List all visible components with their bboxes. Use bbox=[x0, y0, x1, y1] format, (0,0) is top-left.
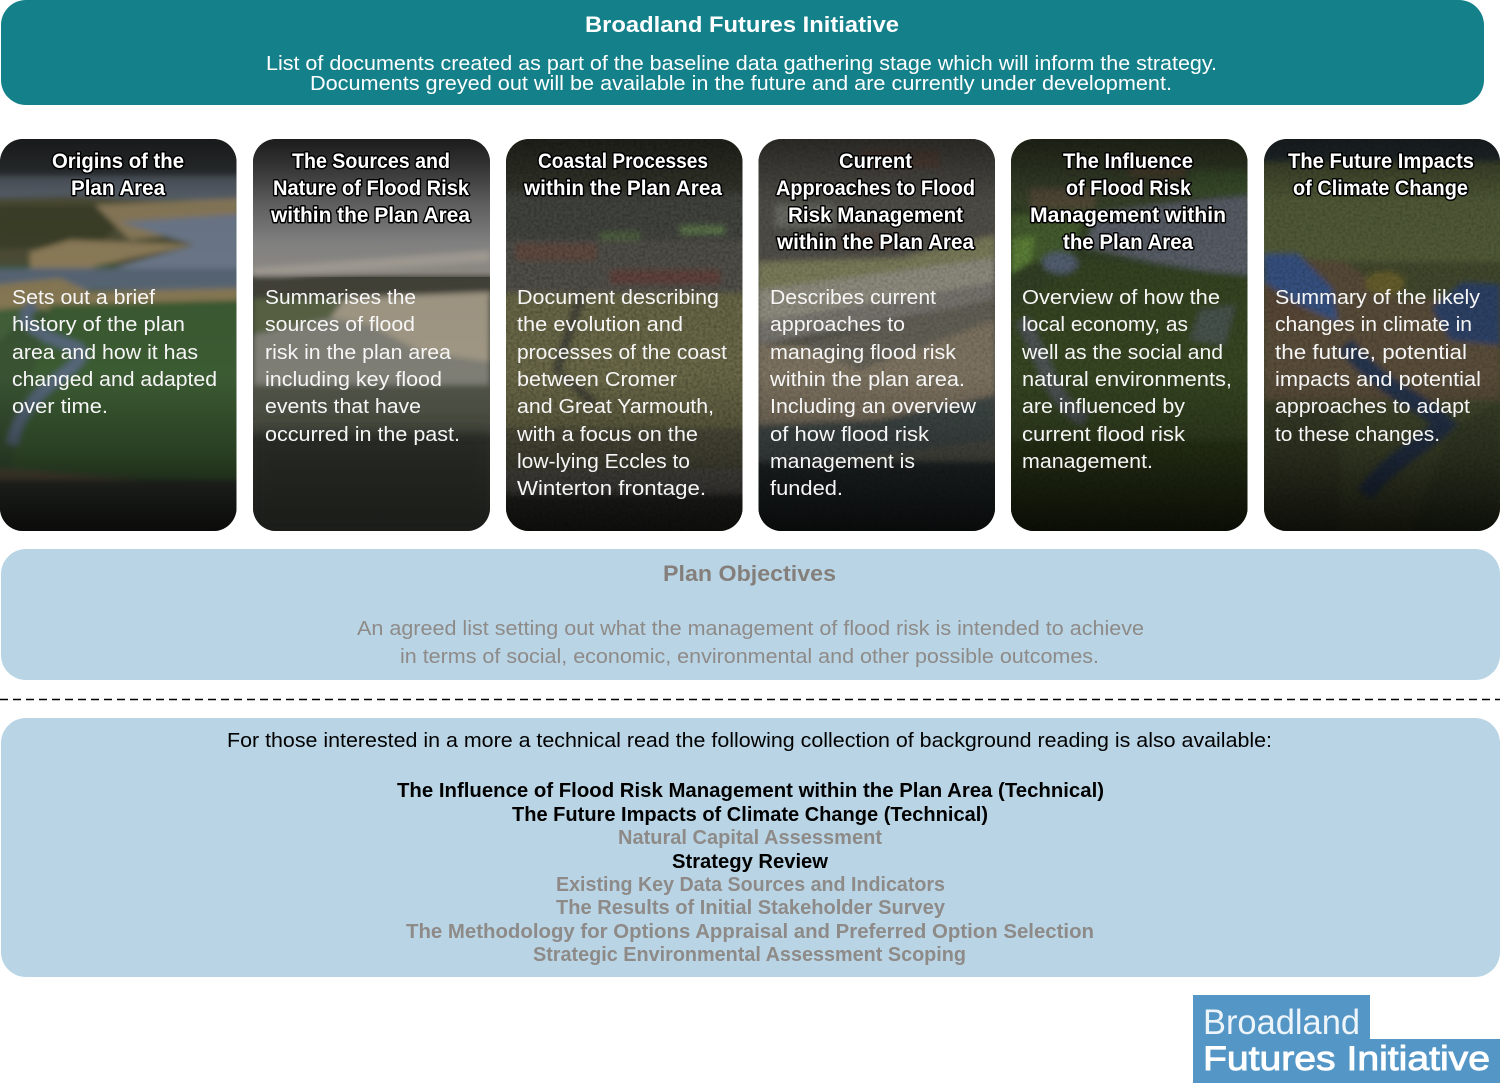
card title: Plan Area bbox=[71, 177, 165, 200]
photo: coastal town and dunes bbox=[500, 135, 750, 536]
panel: Plan Objectives bbox=[1, 549, 1500, 680]
card description: Describes current bbox=[770, 287, 936, 309]
card description: Overview of how the bbox=[1022, 287, 1220, 309]
card description: over time. bbox=[12, 396, 108, 418]
panel: technical background reading bbox=[1, 718, 1500, 977]
card description: Summarises the bbox=[265, 287, 416, 309]
card title: within the Plan Area bbox=[270, 204, 470, 227]
panel: The Future Impacts of Climate Change bbox=[1258, 135, 1500, 535]
card title bbox=[270, 150, 470, 227]
card description: area and how it has bbox=[12, 342, 198, 364]
logo: Broadland Futures Initiative: Broadland bbox=[1203, 1003, 1360, 1042]
card description bbox=[265, 287, 460, 446]
card title: The Influence bbox=[1063, 150, 1193, 173]
panel: The Sources and Nature of Flood Risk bbox=[248, 139, 495, 537]
card description bbox=[1275, 287, 1481, 446]
card description: events that have bbox=[265, 396, 421, 418]
card title: The Sources and bbox=[292, 150, 450, 173]
logo: Broadland Futures Initiative bbox=[1193, 995, 1500, 1083]
header description bbox=[266, 53, 1217, 95]
card description: risk in the plan area bbox=[265, 342, 452, 364]
plan objectives description: An agreed list setting out what the management of flood risk is intended to achieve bbox=[357, 618, 1144, 640]
card description: within the plan area. bbox=[769, 369, 965, 391]
reading list: The Results of Initial Stakeholder Survey bbox=[556, 897, 946, 919]
card title: Coastal Processes bbox=[538, 150, 708, 173]
header description: Documents greyed out will be available in the future and are currently under development. bbox=[310, 73, 1172, 95]
reading list: Strategy Review bbox=[672, 851, 828, 873]
card description: Document describing bbox=[517, 287, 719, 309]
card title: within the Plan Area bbox=[776, 231, 974, 254]
card title bbox=[523, 150, 722, 200]
card description: including key flood bbox=[265, 369, 442, 391]
card title: Approaches to Flood bbox=[776, 177, 975, 200]
reading list bbox=[397, 780, 1104, 966]
card description: management is bbox=[770, 451, 915, 473]
card description bbox=[516, 287, 727, 500]
card description: changed and adapted bbox=[12, 369, 217, 391]
plan objectives description bbox=[357, 618, 1144, 668]
plan objectives description: in terms of social, economic, environmental and other possible outcomes. bbox=[400, 646, 1099, 668]
panel: Origins of the Plan Area bbox=[0, 135, 242, 535]
card description: well as the social and bbox=[1021, 342, 1223, 364]
reading list: The Influence of Flood Risk Management within the Plan Area (Technical) bbox=[397, 780, 1104, 802]
photo: broads marshland and fields bbox=[0, 135, 242, 535]
card description: with a focus on the bbox=[516, 424, 698, 446]
logo: Broadland Futures Initiative: Futures Initiative bbox=[1203, 1040, 1490, 1078]
card title: of Flood Risk bbox=[1066, 177, 1191, 200]
card title: within the Plan Area bbox=[523, 177, 722, 200]
card description: the evolution and bbox=[517, 314, 683, 336]
card title bbox=[1030, 150, 1226, 254]
card description: approaches to bbox=[770, 314, 905, 336]
card description: Summary of the likely bbox=[1275, 287, 1480, 309]
card title: The Future Impacts bbox=[1288, 150, 1474, 173]
plan objectives heading: Plan Objectives bbox=[663, 561, 836, 586]
reading list: Existing Key Data Sources and Indicators bbox=[556, 874, 945, 896]
photo: flooded river at dusk bbox=[248, 139, 495, 537]
card description: impacts and potential bbox=[1275, 369, 1481, 391]
panel: The Influence of Flood Risk Management bbox=[1005, 135, 1255, 535]
card title: Origins of the bbox=[52, 150, 184, 173]
header banner bbox=[1, 0, 1484, 105]
card title: Risk Management bbox=[788, 204, 963, 227]
card description: history of the plan bbox=[12, 314, 185, 336]
card description bbox=[769, 287, 977, 500]
card description: between Cromer bbox=[517, 369, 677, 391]
card description: to these changes. bbox=[1275, 424, 1440, 446]
card description: are influenced by bbox=[1022, 396, 1185, 418]
reading list introduction: For those interested in a more a technical read the following collection of background reading is also available: bbox=[227, 730, 1272, 752]
card description: and Great Yarmouth, bbox=[517, 396, 714, 418]
card title: Current bbox=[839, 150, 912, 173]
card description: current flood risk bbox=[1022, 424, 1186, 446]
card description: sources of flood bbox=[265, 314, 415, 336]
card description: natural environments, bbox=[1022, 369, 1232, 391]
reading list: Strategic Environmental Assessment Scoping bbox=[533, 944, 966, 966]
card title: Nature of Flood Risk bbox=[273, 177, 469, 200]
card description: occurred in the past. bbox=[265, 424, 460, 446]
card title: of Climate Change bbox=[1293, 177, 1468, 200]
card description: funded. bbox=[770, 478, 843, 500]
card description: local economy, as bbox=[1022, 314, 1188, 336]
reading list: Natural Capital Assessment bbox=[618, 827, 882, 849]
panel: Coastal Processes bbox=[500, 135, 750, 536]
card description: Winterton frontage. bbox=[517, 478, 706, 500]
card title: the Plan Area bbox=[1063, 231, 1193, 254]
card title bbox=[776, 150, 975, 254]
reading list: The Future Impacts of Climate Change (Technical) bbox=[512, 804, 988, 826]
card description: changes in climate in bbox=[1275, 314, 1472, 336]
card title: Management within bbox=[1030, 204, 1226, 227]
card title bbox=[1288, 150, 1474, 200]
header description: List of documents created as part of the baseline data gathering stage which will inform the strategy. bbox=[266, 53, 1217, 75]
card title bbox=[52, 150, 184, 200]
reading list: The Methodology for Options Appraisal and Preferred Option Selection bbox=[406, 921, 1094, 943]
photo: sea wall and seafront houses bbox=[752, 135, 1002, 537]
card description: Sets out a brief bbox=[12, 287, 155, 309]
card description: of how flood risk bbox=[770, 424, 930, 446]
photo: river valley and woodland bbox=[1005, 135, 1255, 535]
card description bbox=[1021, 287, 1232, 473]
photo: aerial view of broads and woodland bbox=[1258, 135, 1500, 535]
card description: the future, potential bbox=[1275, 342, 1467, 364]
panel: Current Approaches to Flood Risk Management bbox=[752, 135, 1002, 537]
card description: managing flood risk bbox=[770, 342, 957, 364]
card description: approaches to adapt bbox=[1275, 396, 1470, 418]
card description: processes of the coast bbox=[517, 342, 727, 364]
header title: Broadland Futures Initiative bbox=[585, 12, 899, 37]
card description: management. bbox=[1022, 451, 1153, 473]
card description: Including an overview bbox=[770, 396, 977, 418]
card description bbox=[12, 287, 217, 418]
card description: low-lying Eccles to bbox=[517, 451, 690, 473]
